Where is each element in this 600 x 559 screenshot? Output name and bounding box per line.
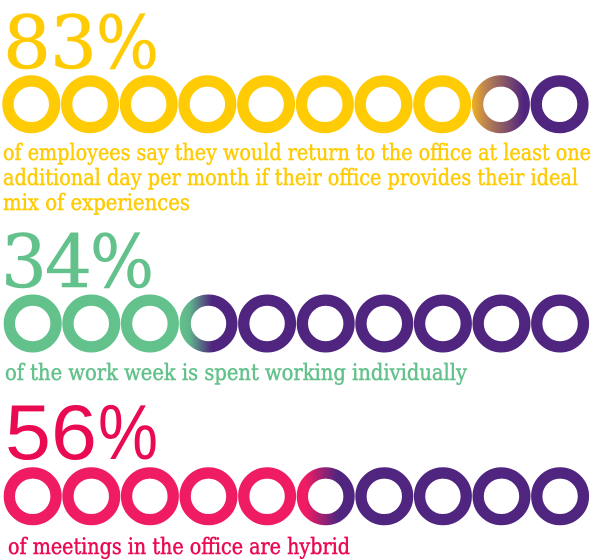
panel: 34% statistic (1, 220, 583, 386)
caption: 34% text: of the work week is spent working individually (5, 361, 468, 386)
heading: 56% (5, 388, 158, 476)
heading: 56%: % (98, 388, 158, 476)
caption: 83% text: mix of experiences (3, 191, 190, 216)
heading: 83% (3, 1, 159, 86)
heading: 34% (1, 220, 154, 305)
ring row: 34 percent (9, 300, 583, 347)
heading: 83%: % (96, 1, 159, 86)
ring row: 83 percent (8, 81, 583, 128)
caption: 83% text (3, 141, 591, 216)
heading: 56%: 5 (5, 388, 51, 476)
panel: 83% statistic (3, 1, 591, 216)
heading: 34%: 3 (1, 220, 47, 305)
heading: 56%: 6 (51, 388, 97, 476)
panel: 56% statistic (5, 388, 583, 559)
heading: 34%: % (90, 220, 154, 305)
heading: 34%: 4 (45, 220, 92, 305)
heading: 83%: 8 (3, 1, 51, 86)
heading: 83%: 3 (50, 1, 97, 86)
ring row: 56 percent (9, 473, 583, 520)
